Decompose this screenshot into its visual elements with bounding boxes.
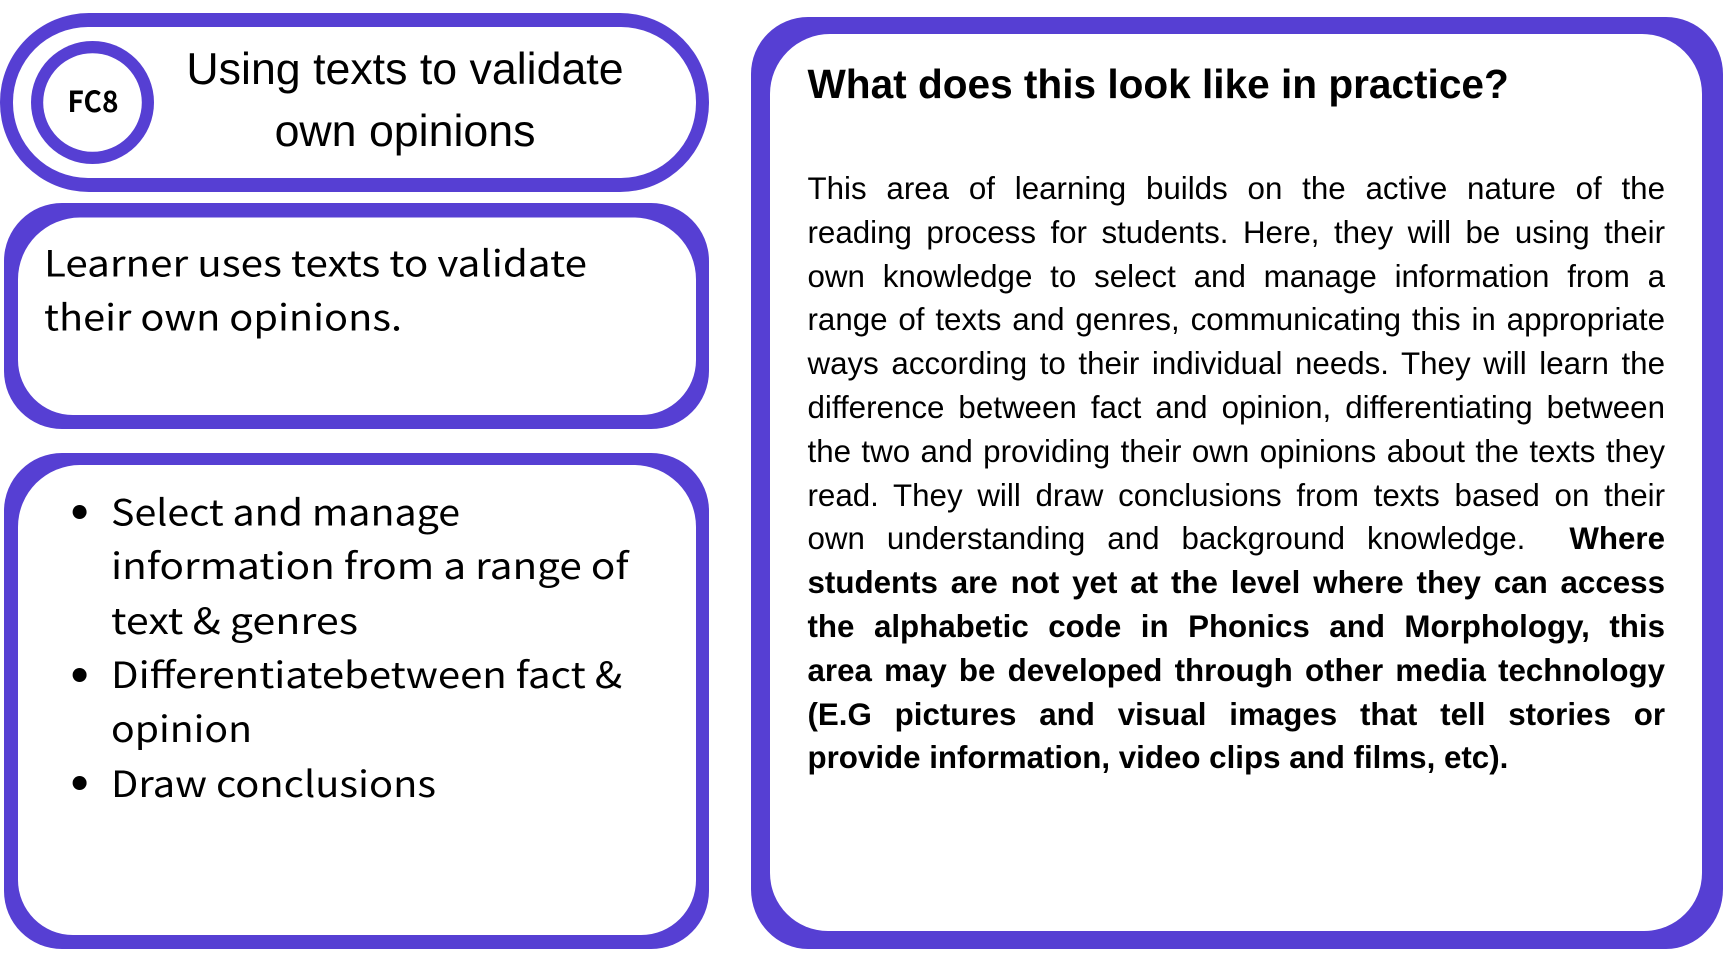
text block: practice description: range of texts and genres, communicating this in appropriate xyxy=(808,302,1665,337)
text block: practice description: provide information, video clips and films, etc). xyxy=(808,740,1508,775)
bullet list: information from a range of xyxy=(111,538,630,590)
bullet list xyxy=(73,484,630,808)
bullet list: opinion xyxy=(111,701,252,753)
panel: what does this look like in practice xyxy=(751,17,1722,949)
icon: FC8 badge xyxy=(31,41,154,164)
text block: learner statement xyxy=(44,236,587,342)
text block: practice description: (E.G pictures and visual images that tell stories or xyxy=(808,697,1665,732)
bullet list: Differentiatebetween fact & xyxy=(111,647,622,699)
bullet list: Draw conclusions xyxy=(111,756,436,808)
panel: skills list xyxy=(4,453,709,949)
text block: practice description: students are not yet at the level where they can access xyxy=(808,565,1665,600)
text block: practice description xyxy=(808,171,1666,775)
text block: practice description: the alphabetic code in Phonics and Morphology, this xyxy=(808,609,1665,644)
text block: practice description: ways according to their individual needs. They will learn the xyxy=(808,346,1665,381)
text block: practice description: This area of learning builds on the active nature of the xyxy=(808,171,1665,206)
text block: practice description: own understanding and background knowledge. Where xyxy=(808,521,1665,556)
text block: learner statement: Learner uses texts to validate xyxy=(44,236,587,288)
heading: practice: What does this look like in practice? xyxy=(808,61,1509,107)
panel: learner statement xyxy=(4,203,709,429)
title: Using texts to validate xyxy=(186,45,624,94)
text block: practice description: difference between fact and opinion, differentiating between xyxy=(808,390,1665,425)
text block: practice description: the two and providing their own opinions about the texts they xyxy=(808,434,1665,469)
title xyxy=(186,45,624,156)
bullet list: Select and manage xyxy=(111,484,460,536)
text block: learner statement: their own opinions. xyxy=(44,290,402,342)
icon: FC8 badge: FC8 xyxy=(68,79,118,121)
text block: practice description: area may be developed through other media technology xyxy=(808,653,1665,688)
bullet list: text & genres xyxy=(111,593,358,645)
panel: title pill xyxy=(0,13,709,192)
text block: practice description: reading process for students. Here, they will be using their xyxy=(808,215,1665,250)
text block: practice description: read. They will draw conclusions from texts based on their xyxy=(808,478,1665,513)
title: own opinions xyxy=(275,107,535,156)
text block: practice description: own knowledge to select and manage information from a xyxy=(808,259,1665,294)
